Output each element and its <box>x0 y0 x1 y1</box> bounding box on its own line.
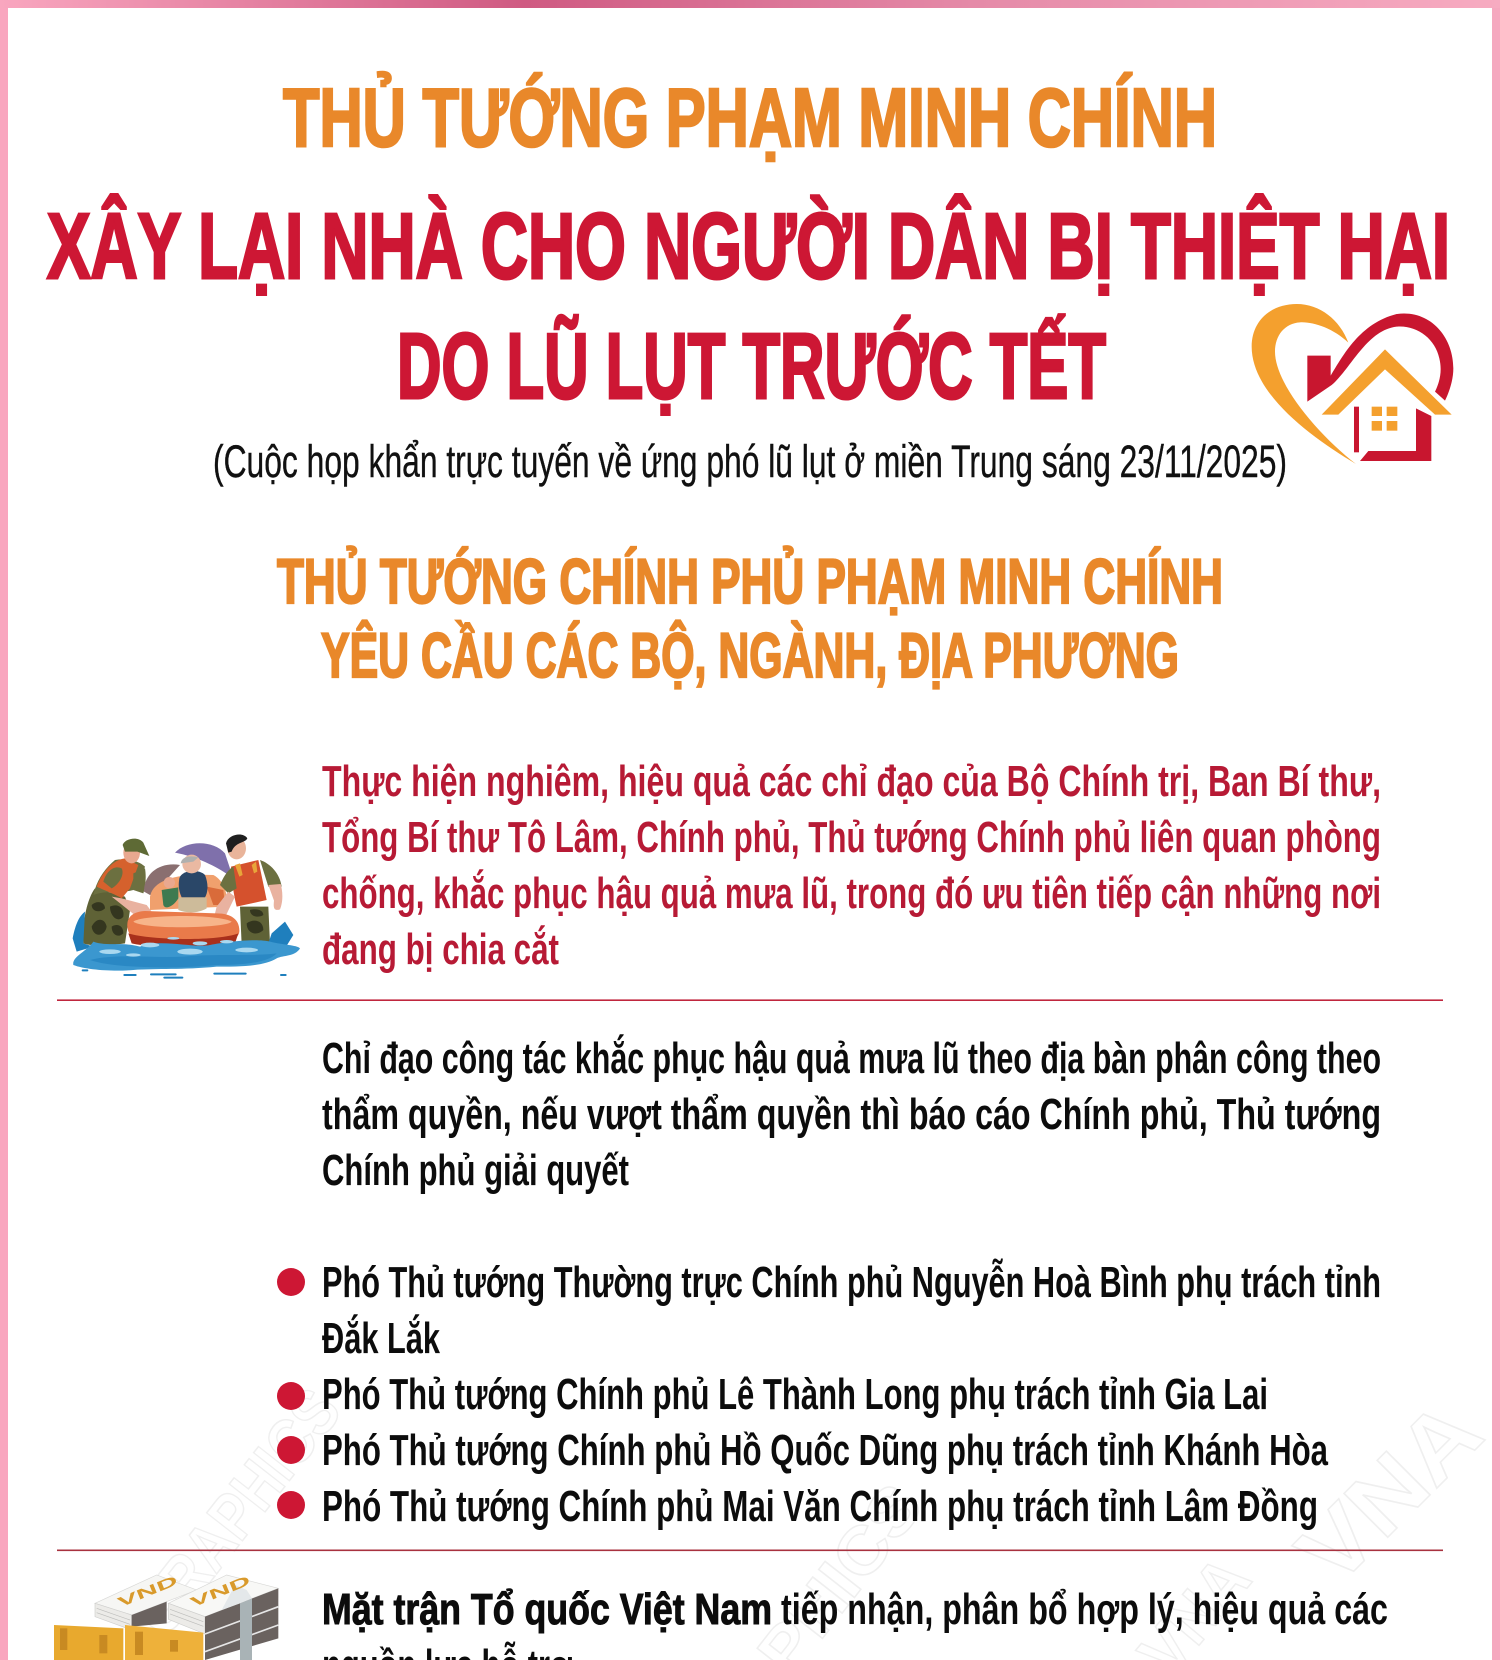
red directive paragraph: đang bị chia cắt <box>322 924 559 974</box>
bottom paragraph: Mặt trận Tổ quốc Việt Nam: Mặt trận Tổ quốc Việt Nam <box>322 1585 772 1634</box>
watermark <box>118 1375 1500 1660</box>
bottom paragraph: Mặt trận Tổ quốc Việt Nam <box>322 1585 1388 1660</box>
black directive paragraph <box>322 1033 1381 1195</box>
bullet: Nguyễn Hoà Bình: Đắk Lắk <box>322 1313 440 1363</box>
watermark: GRAPHICS <box>118 1375 355 1649</box>
icon: heart and house logo <box>1252 304 1453 464</box>
title line 3: DO LŨ LỤT TRƯỚC TẾT <box>397 314 1106 418</box>
black directive paragraph: Chính phủ giải quyết <box>322 1146 629 1195</box>
icon: money stacks and boxes: VND <box>115 1572 180 1610</box>
assignment bullet list <box>277 1257 1381 1531</box>
bullet: Nguyễn Hoà Bình <box>277 1257 1381 1363</box>
red directive paragraph <box>322 757 1381 974</box>
icon: money stacks and boxes <box>54 1572 278 1660</box>
icon: money stacks and boxes: VND <box>188 1572 253 1610</box>
watermark: VNA <box>1278 1381 1500 1604</box>
icon: flood rescue boat <box>73 835 300 979</box>
